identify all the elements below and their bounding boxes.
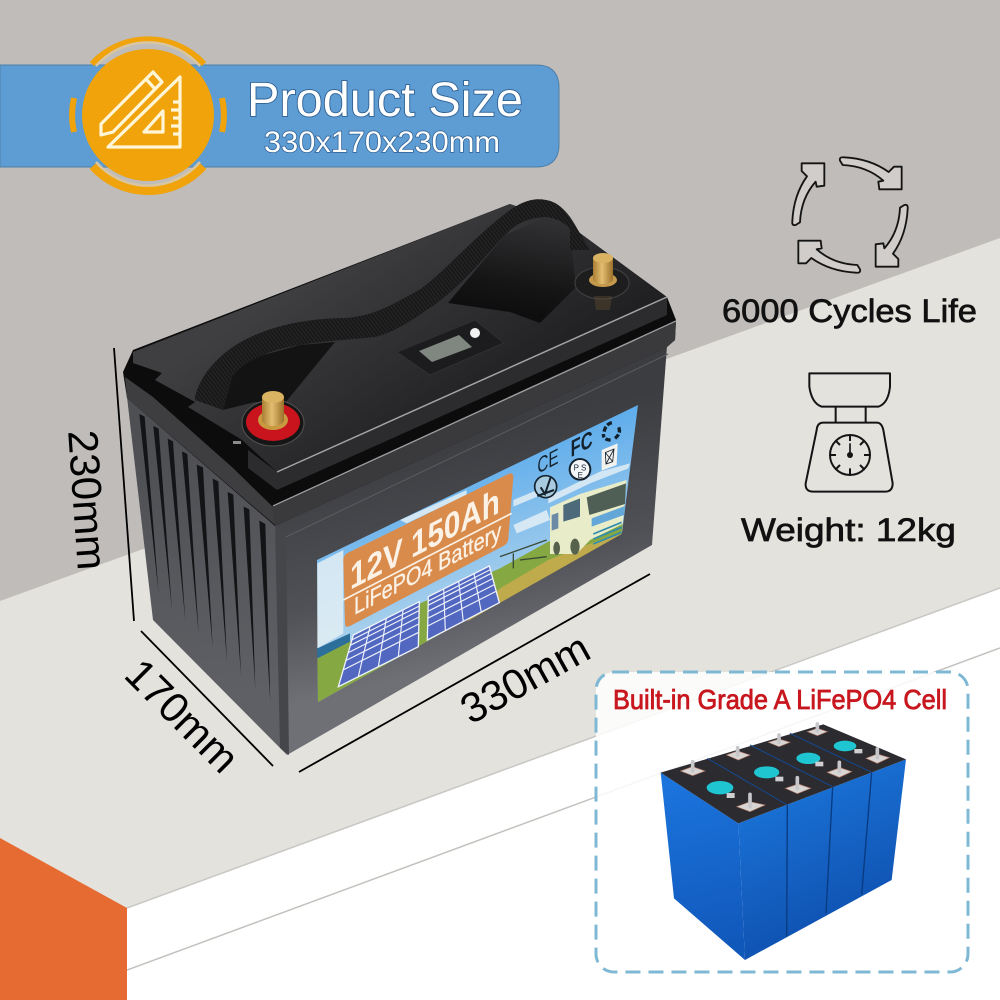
top seams: [707, 733, 872, 805]
strap shadow left: [223, 342, 335, 410]
dimension: depth: [116, 631, 273, 782]
floor: [0, 238, 1000, 1000]
step lower line: [127, 648, 1000, 970]
upper lid surface: [133, 204, 667, 472]
fence: [500, 540, 547, 568]
cell left face: [661, 773, 745, 960]
strap shadow right: [448, 217, 576, 323]
motorhome: [550, 480, 627, 555]
ledge side face: [125, 377, 275, 525]
battery: [123, 199, 676, 755]
lid corner clip highlight: [233, 441, 241, 444]
icon: ruler and pencil: [101, 72, 180, 147]
battery front face: [275, 346, 667, 755]
orange title plate: [343, 473, 513, 627]
body top crease: [286, 354, 668, 537]
length line: [299, 574, 650, 772]
step edge line: [127, 588, 1000, 908]
icon: weighing scale: [806, 373, 893, 492]
cycles life text: 6000 Cycles Life: [722, 293, 977, 329]
panel: built-in cells: [596, 672, 968, 972]
banner bar: [0, 65, 559, 167]
solar panels right: [427, 566, 499, 640]
depth label: 170mm: [116, 650, 248, 782]
length label: 330mm: [452, 624, 598, 733]
field: [467, 532, 622, 622]
depth line: [141, 631, 273, 766]
height label: 230mm: [59, 428, 116, 571]
orange corner block: [0, 838, 127, 1000]
cell right faces: [738, 759, 906, 960]
vents: [707, 741, 856, 794]
banner title: Product Size: [247, 74, 523, 127]
cell stack: [661, 724, 906, 960]
ledge highlight: [273, 321, 676, 506]
lid edge highlight: [277, 297, 667, 472]
banner: product size: [0, 39, 559, 190]
terminals: [681, 728, 889, 812]
weight text: Weight: 12kg: [741, 512, 956, 548]
banner dimensions: 330x170x230mm: [264, 126, 500, 159]
PSE text: P S: [574, 464, 586, 473]
plate divider: [343, 513, 512, 600]
black carrying strap: [195, 199, 590, 410]
ledge front face: [273, 322, 676, 526]
terminal posts: [693, 724, 877, 807]
battery side face: [127, 397, 287, 755]
orange badge: [72, 39, 224, 190]
fill ports: [727, 749, 862, 798]
battery side grooves: [139, 414, 270, 702]
dimension: height: [59, 348, 134, 621]
cell seams: [787, 772, 872, 937]
label heading 12V 150Ah: 12V 150Ah: [350, 479, 500, 598]
height line: [114, 348, 134, 621]
certification marks: [535, 423, 619, 498]
grass: [317, 524, 623, 702]
lid front face: [248, 297, 667, 490]
lid black base: [123, 204, 676, 526]
clouds: [317, 463, 630, 648]
label sky: [317, 405, 638, 702]
white step: [127, 588, 1000, 1000]
panel heading: Built-in Grade A LiFePO4 Cell: [613, 684, 947, 715]
PSE lower letter: E: [578, 471, 583, 480]
negative terminal: [575, 253, 629, 310]
battery corner shading: [275, 525, 289, 755]
label subheading: LiFePO4 Battery: [354, 518, 501, 621]
icon: cycle arrows: [792, 157, 908, 273]
battery display panel: [397, 320, 504, 375]
cell tops: [661, 724, 906, 823]
FC mark: FC: [571, 425, 593, 462]
dimension: length: [299, 574, 650, 772]
CE mark: CE: [537, 443, 559, 479]
panel dashed frame: [596, 672, 968, 972]
positive terminal: [242, 391, 304, 446]
solar panels left: [338, 602, 419, 687]
sea strip: [317, 633, 350, 660]
product label: [317, 405, 638, 702]
